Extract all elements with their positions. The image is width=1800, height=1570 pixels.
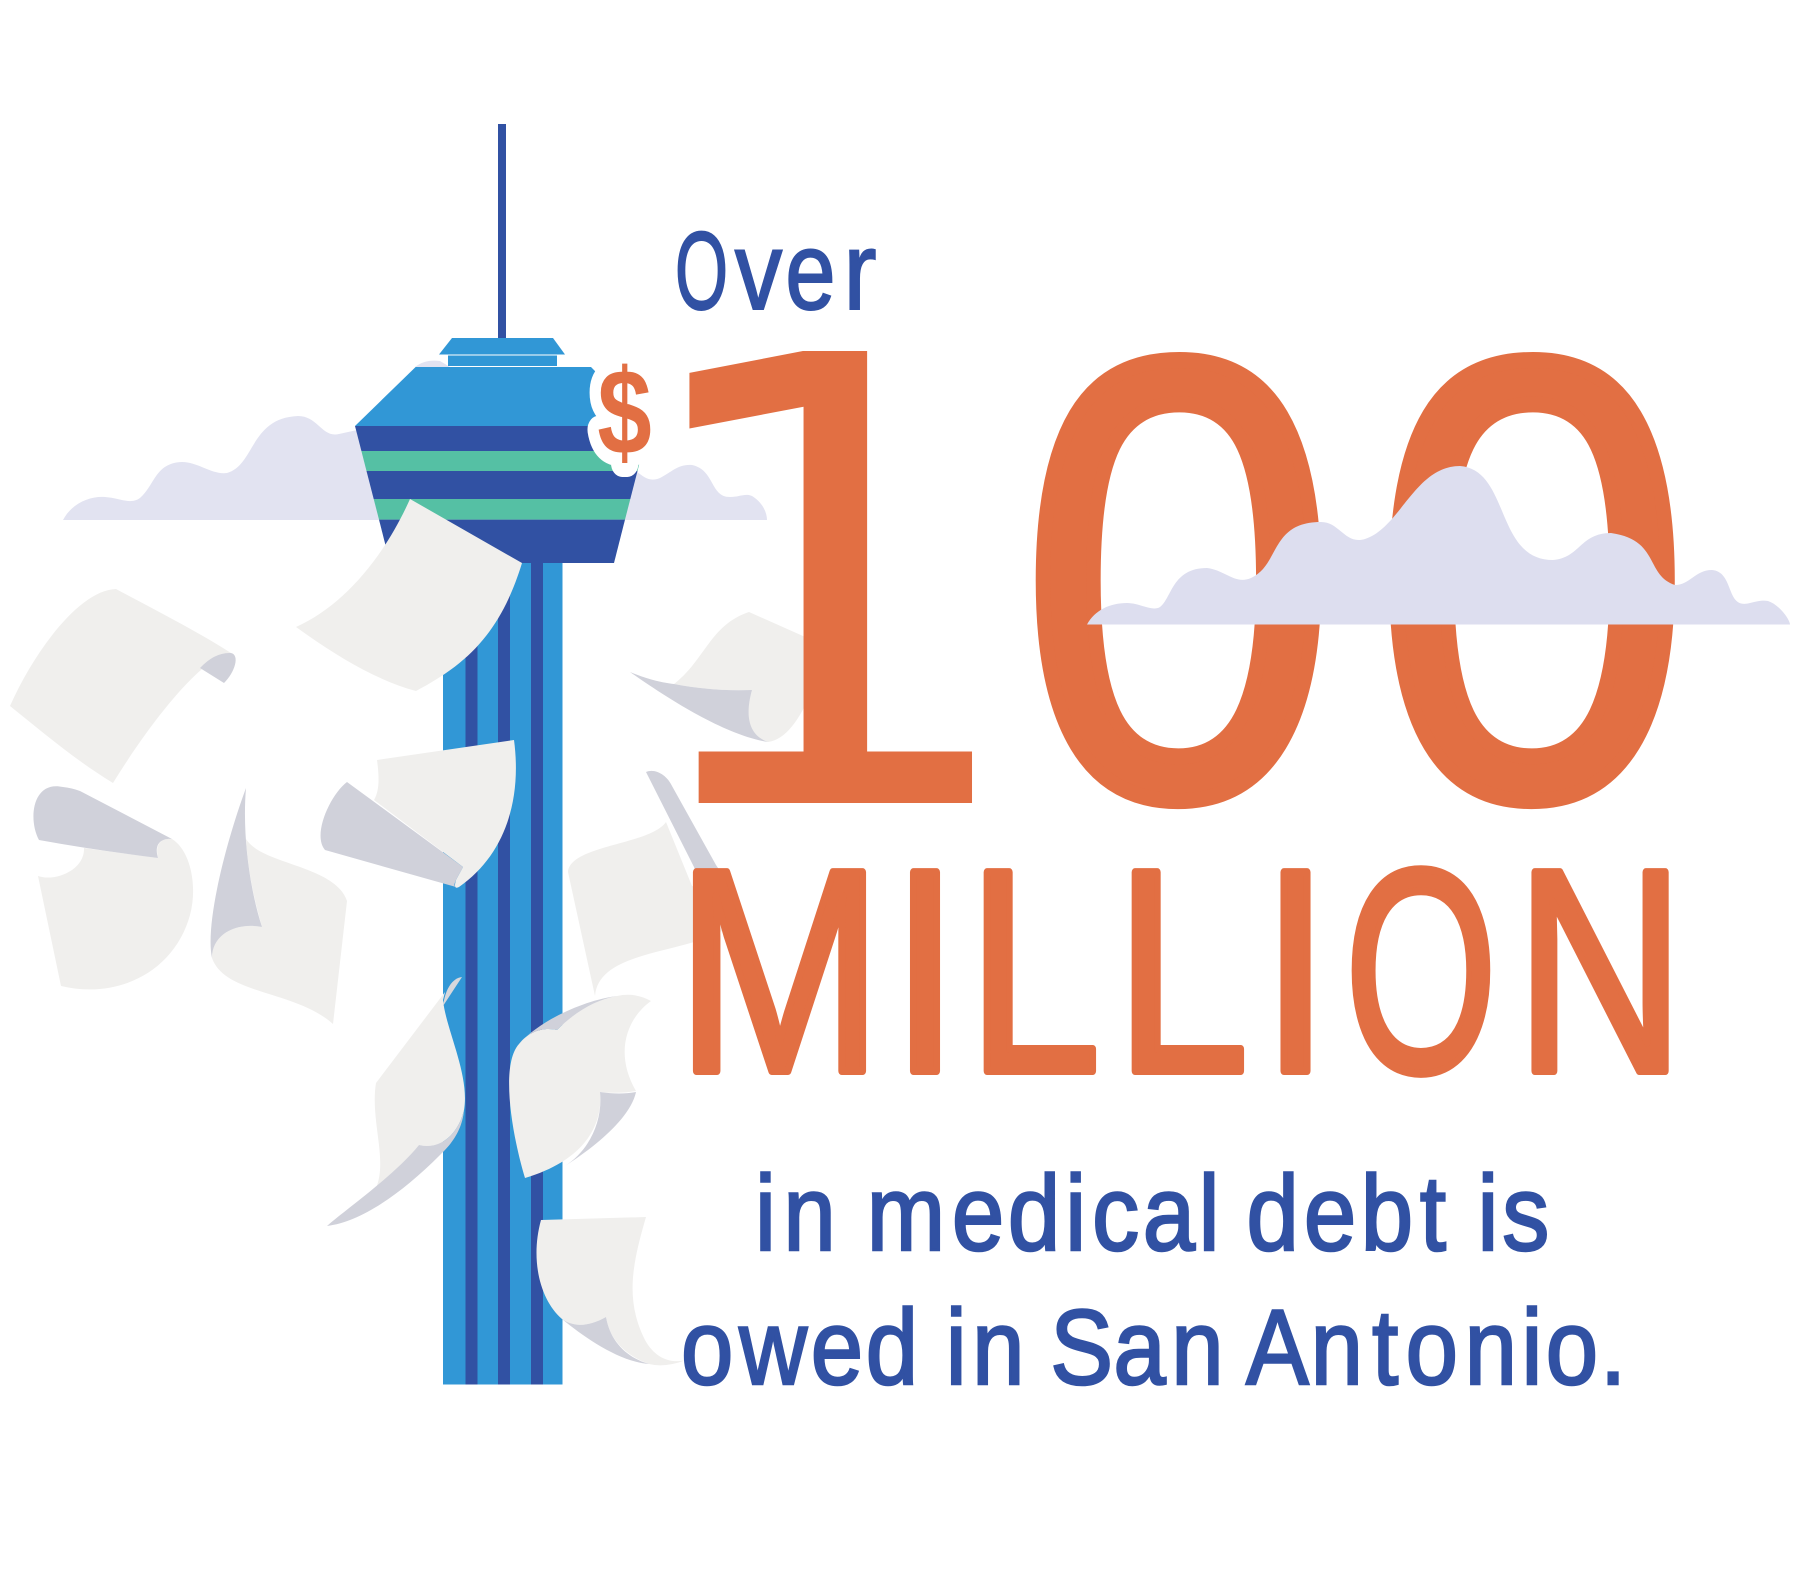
heading: Over: O xyxy=(675,210,728,333)
paper sheet right, behind numeral xyxy=(630,612,812,742)
word MILLION: L xyxy=(1115,811,1249,1133)
tower shaft with stripes xyxy=(443,560,562,1384)
word MILLION: I xyxy=(1261,810,1330,1133)
heading: Over xyxy=(675,209,876,333)
paper sheet bottom xyxy=(537,1217,686,1365)
dollar sign: $ xyxy=(597,345,652,481)
big number 100: 0 xyxy=(1374,232,1690,928)
heading: Over: v xyxy=(735,209,782,333)
word MILLION xyxy=(676,809,1685,1133)
big number 100: 0 xyxy=(1021,232,1336,928)
paper sheet on shaft xyxy=(321,740,516,888)
tower observation deck xyxy=(355,367,649,563)
tower top cap xyxy=(439,338,565,366)
word MILLION: M xyxy=(676,810,883,1133)
word MILLION: I xyxy=(890,810,960,1133)
paper sheet lower centre xyxy=(327,977,465,1226)
word MILLION: N xyxy=(1515,809,1685,1133)
right cloud over number xyxy=(1087,466,1790,624)
caption line 1: in medical debt is xyxy=(755,1154,1549,1273)
big number 100 xyxy=(618,228,1690,949)
paper sheet lower right of shaft xyxy=(509,995,651,1178)
left cloud behind tower xyxy=(63,361,767,520)
paper sheet rolled left xyxy=(33,786,193,989)
big number 100: 1 xyxy=(618,228,1032,949)
word MILLION: O xyxy=(1345,811,1497,1133)
tower antenna xyxy=(498,124,506,340)
word MILLION: L xyxy=(967,811,1101,1133)
heading: Over: r xyxy=(844,210,876,333)
heading: Over: e xyxy=(785,211,836,333)
paper sheet behind M xyxy=(568,771,738,996)
paper sheet folded left xyxy=(211,788,347,1024)
paper sheet over tower xyxy=(296,499,522,691)
paper sheet upper left xyxy=(10,589,236,783)
caption line 2: owed in San Antonio. xyxy=(681,1288,1626,1407)
